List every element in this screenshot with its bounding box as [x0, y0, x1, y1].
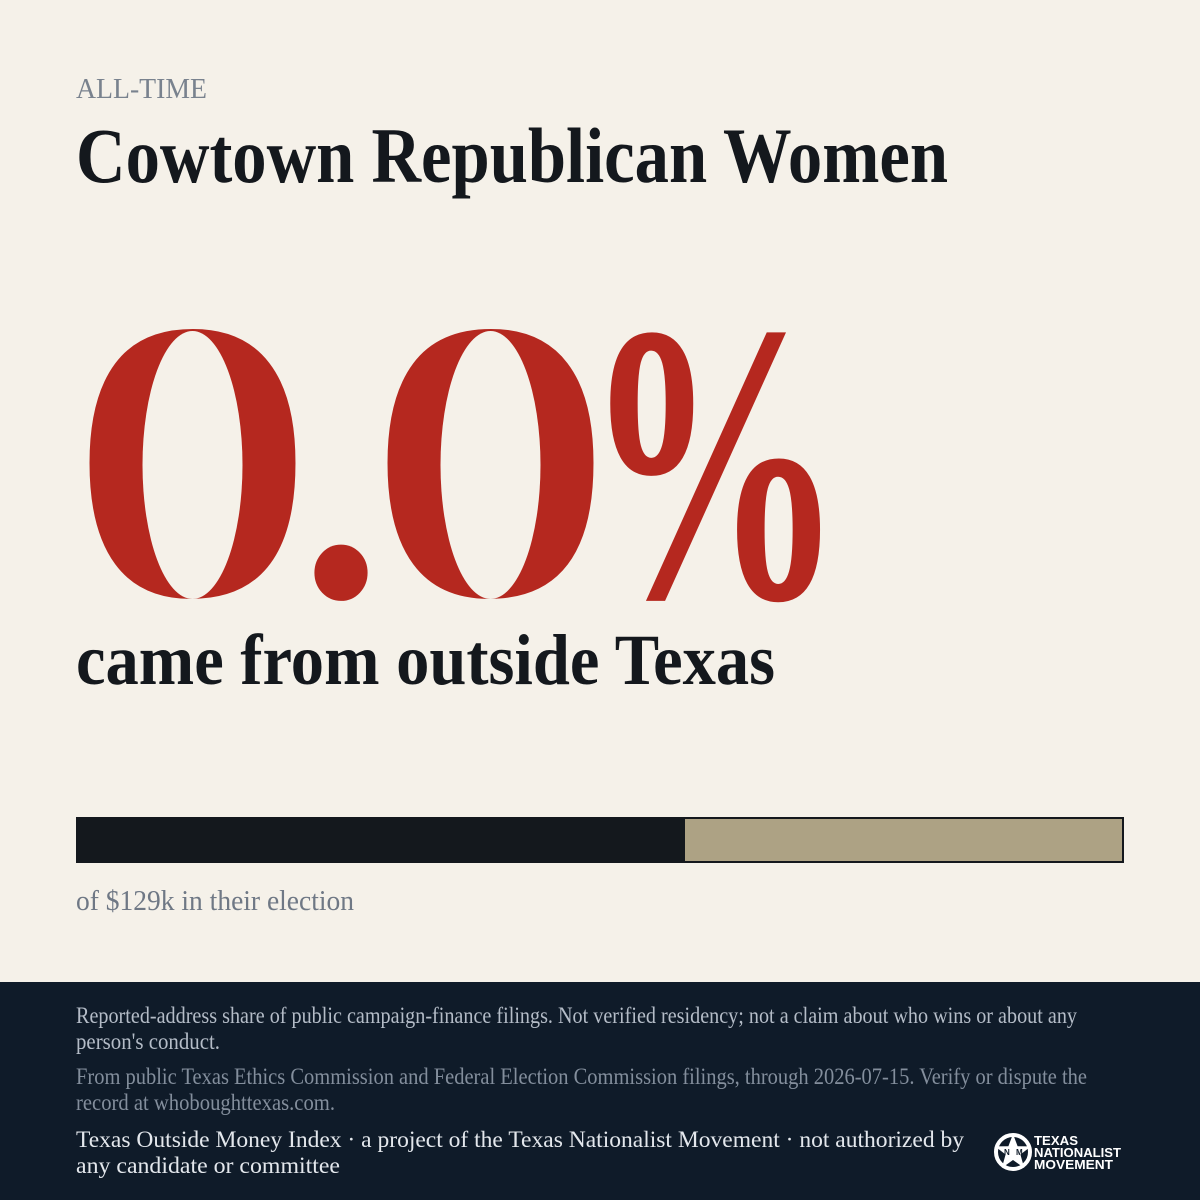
- big percentage: %: [584, 243, 844, 684]
- attribution text: [76, 1127, 964, 1178]
- icon: star in ring: N: [1004, 1148, 1010, 1157]
- big percentage: 0: [71, 239, 314, 682]
- progress bar: [76, 817, 1123, 863]
- footer panel: [0, 982, 1200, 1200]
- logo wordmark: MOVEMENT: [1034, 1157, 1113, 1172]
- subheading: came from outside Texas: [76, 620, 775, 700]
- attribution text: Texas Outside Money Index · a project of the Texas Nationalist Movement · not authorized by: [76, 1127, 964, 1152]
- eyebrow: all-time: ALL-TIME: [76, 73, 207, 105]
- source text: [76, 1064, 1087, 1115]
- logo wordmark: TEXAS: [1034, 1133, 1078, 1148]
- logo wordmark: [1034, 1133, 1121, 1172]
- disclaimer text: Reported-address share of public campaign-finance filings. Not verified residency; not a claim about who wins or about any: [76, 1003, 1077, 1028]
- source text: From public Texas Ethics Commission and Federal Election Commission filings, through 2026-07-15. Verify or dispute the: [76, 1064, 1087, 1089]
- bar caption: of $129k in their election: [76, 885, 354, 917]
- source text: record at whoboughttexas.com.: [76, 1090, 335, 1115]
- big percentage: .: [300, 288, 382, 672]
- disclaimer text: person's conduct.: [76, 1029, 220, 1054]
- logo: Texas Nationalist Movement: [995, 1133, 1121, 1172]
- attribution text: any candidate or committee: [76, 1153, 340, 1178]
- icon: star in ring: [995, 1134, 1031, 1169]
- title: Cowtown Republican Women: [76, 112, 948, 199]
- logo wordmark: NATIONALIST: [1034, 1145, 1121, 1160]
- icon: star in ring: M: [1016, 1148, 1023, 1157]
- big percentage: [71, 239, 844, 684]
- big percentage: 0: [369, 239, 612, 682]
- disclaimer text: [76, 1003, 1077, 1054]
